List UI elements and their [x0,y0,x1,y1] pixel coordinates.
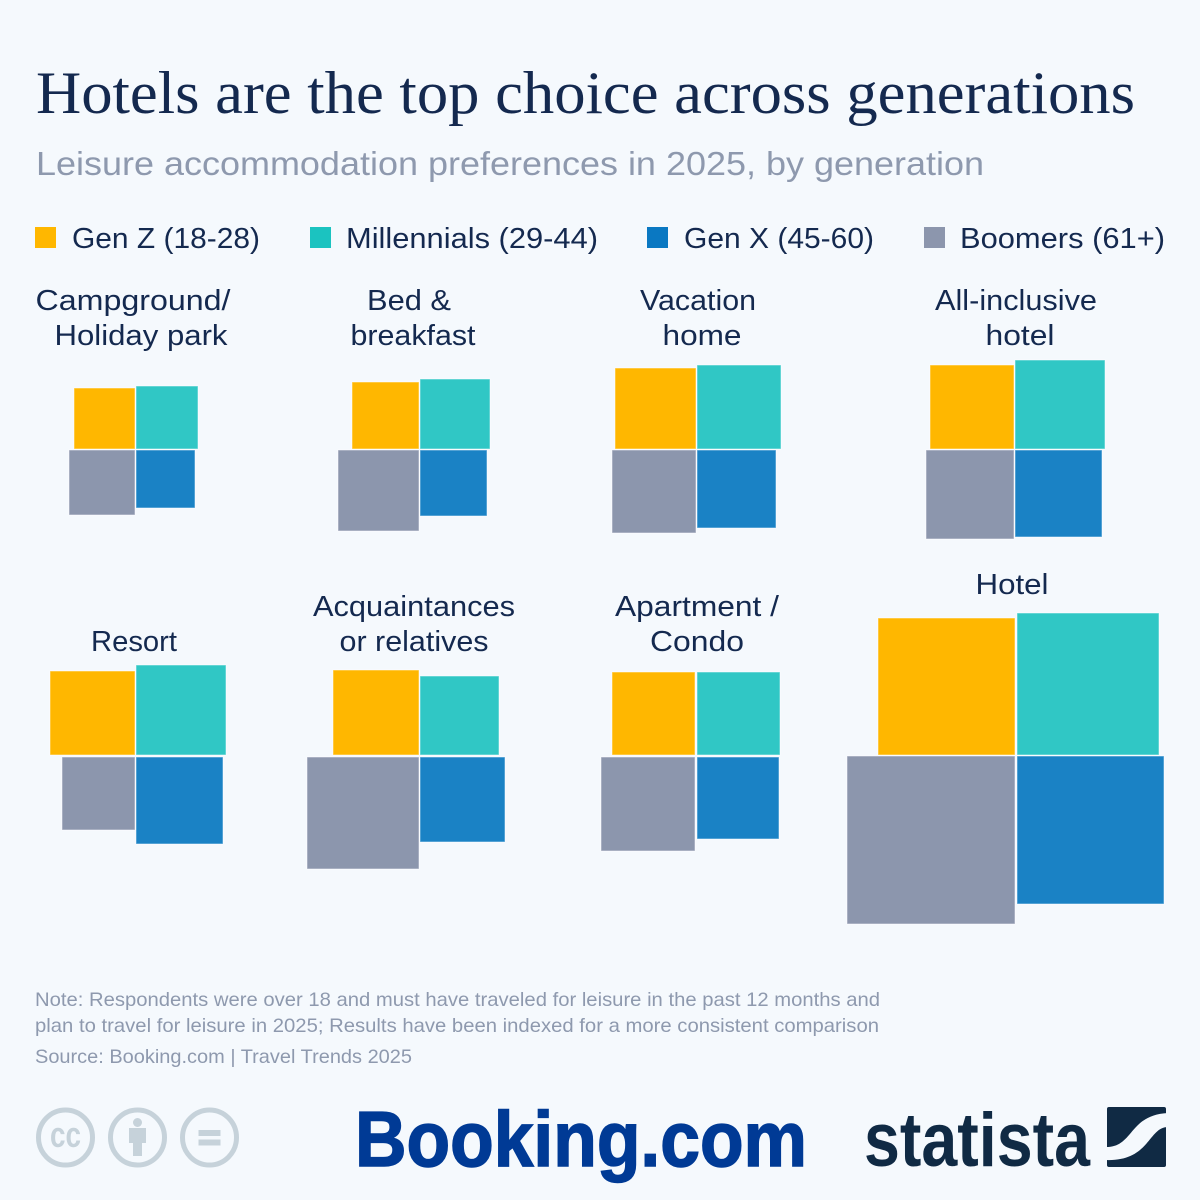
note and source: Note: Respondents were over 18 and must have traveled for leisure in the past 12 months and [35,989,880,1011]
heading: Campground: Campground/ [36,285,232,317]
heading: Bed & breakfast [350,285,476,352]
panel: Campground / Holiday park [36,285,232,515]
legend: Millennials: Millennials (29-44) [346,223,598,255]
heading: Apartment / Condo: Apartment / [615,591,780,623]
legend: Boomers: Boomers (61+) [960,223,1165,255]
logo: Booking.com: Booking.com [355,1095,807,1183]
heading: All-inclusive hotel: hotel [986,320,1054,352]
icon: no derivatives [182,1110,236,1165]
panel: Hotel [847,569,1164,924]
heading: Apartment / Condo [615,591,780,658]
panel: All-inclusive hotel [926,285,1105,539]
legend: Gen Z: Gen Z (18-28) [72,223,260,255]
legend [35,223,1165,255]
logo: statista: statista [864,1098,1091,1183]
heading: Campground [36,285,232,352]
heading: Vacation home [640,285,756,352]
icon: cc license [38,1110,92,1165]
heading: Acquaintances: Acquaintances [313,591,515,623]
icon: statista mark [1105,1107,1168,1167]
heading: Vacation home: Vacation [640,285,756,317]
heading: Vacation home: home [662,320,742,352]
heading: All-inclusive hotel: All-inclusive [935,285,1097,317]
heading: Resort: Resort [91,626,177,658]
heading: Hotel: Hotel [976,569,1048,601]
note and source: plan to travel for leisure in 2025; Results have been indexed for a more consistent comparison [35,1015,879,1037]
chart: Campground squares [69,386,198,515]
chart: Hotel squares [847,613,1164,924]
legend: Gen X: Gen X (45-60) [684,223,874,255]
chart: Apartment squares [601,672,780,851]
heading: Bed & breakfast: Bed & [367,285,451,317]
heading: Apartment / Condo: Condo [650,626,744,658]
chart: Vacation home squares [612,365,781,533]
panel: Acquaintances or relatives [307,591,515,869]
panel: Resort [50,626,226,844]
panel: Vacation home [612,285,781,533]
heading: All-inclusive hotel [935,285,1097,352]
heading: Acquaintances [313,591,515,658]
heading: Campground: Holiday park [54,320,228,352]
icon: cc license: cc [50,1114,81,1155]
heading: Bed & breakfast: breakfast [350,320,476,352]
chart: Acquaintances squares [307,670,505,869]
panel: Bed & breakfast [338,285,490,531]
chart: Resort squares [50,665,226,844]
title: Hotels are the top choice across generations [36,60,1135,126]
panel: Apartment / Condo [601,591,780,851]
note and source: Source: Booking.com | Travel Trends 2025 [35,1046,412,1068]
subtitle: Leisure accommodation preferences in 2025, by generation [36,145,984,182]
chart: All-inclusive squares [926,360,1105,539]
note and source [35,989,880,1068]
icon: attribution person [110,1110,164,1165]
heading: Acquaintances: or relatives [340,626,488,658]
chart: Bed & breakfast squares [338,379,490,531]
